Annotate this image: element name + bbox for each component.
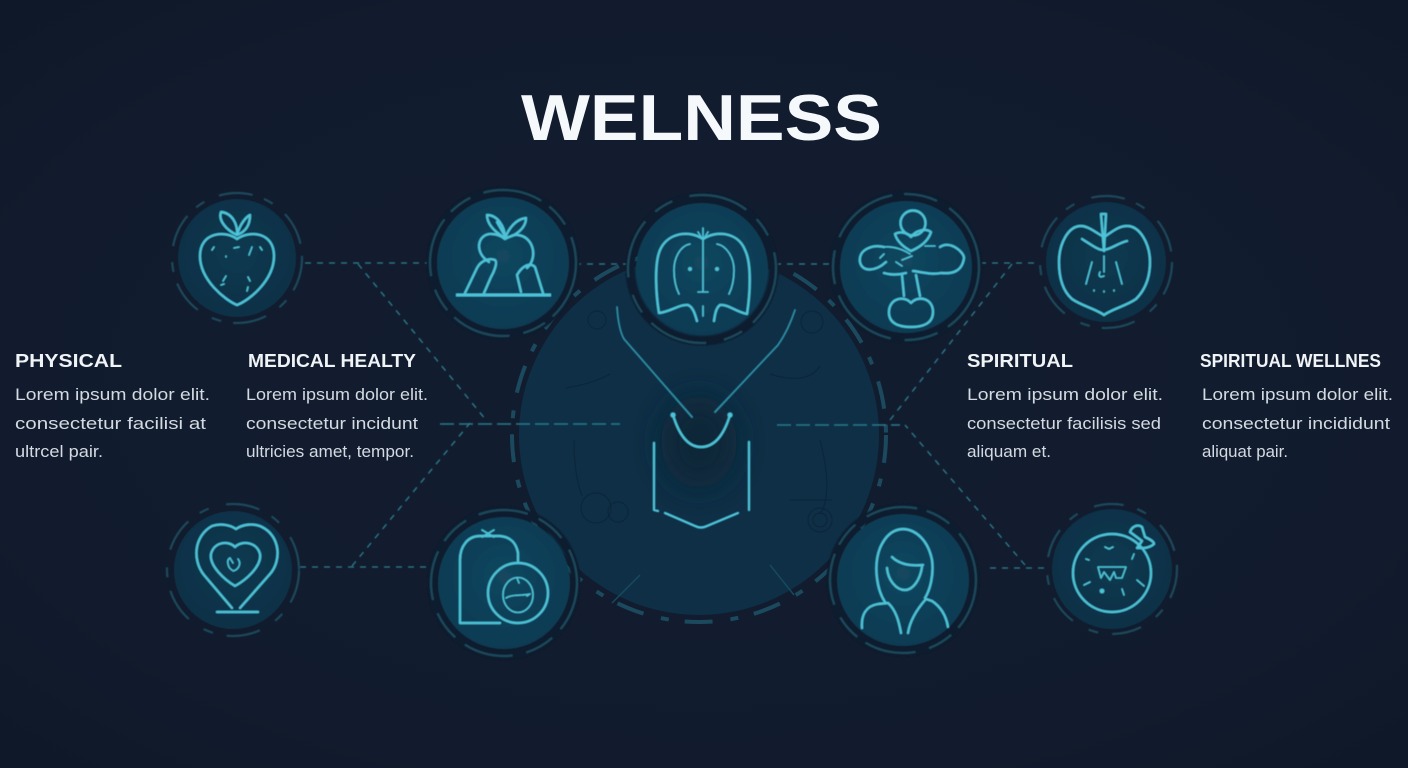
text block: spiritual wellness: consectetur incididunt	[1202, 414, 1390, 433]
text block: physical: consectetur facilisi at	[15, 414, 206, 433]
text block: medical health: consectetur incidunt	[246, 414, 418, 433]
text block: physical	[15, 351, 210, 461]
icon circle: woman	[830, 507, 976, 653]
title: WELNESS	[521, 81, 882, 154]
text block: spiritual	[967, 351, 1163, 461]
connector lines	[300, 263, 1046, 568]
icon circle: heart	[167, 504, 299, 636]
text block: spiritual wellness: aliquat pair.	[1202, 442, 1288, 461]
icon circle: apple and hands	[430, 190, 576, 336]
text block: spiritual: consectetur facilisis sed	[967, 414, 1161, 433]
text block: spiritual wellness: SPIRITUAL WELLNES	[1200, 351, 1381, 371]
icon circle: person portrait	[431, 510, 577, 656]
text block: medical health: ultricies amet, tempor.	[246, 442, 414, 461]
text block: medical health	[246, 351, 428, 461]
icon circle: fruit globe	[1047, 504, 1177, 634]
text block: physical: Lorem ipsum dolor elit.	[15, 385, 210, 404]
text block: physical: ultrcel pair.	[15, 442, 103, 461]
text block: spiritual wellness	[1200, 351, 1393, 461]
central body icon	[617, 307, 795, 528]
icon circle: lotus figure	[833, 194, 979, 340]
text block: spiritual wellness: Lorem ipsum dolor elit.	[1202, 385, 1393, 404]
text block: medical health: MEDICAL HEALTY	[248, 351, 416, 371]
icon circle: mind	[628, 195, 776, 343]
icon circle: leaf	[1040, 196, 1172, 328]
text block: physical: PHYSICAL	[15, 351, 122, 371]
central hub circle	[512, 248, 886, 622]
icon circle: fruit heart	[172, 193, 302, 323]
text block: spiritual: SPIRITUAL	[967, 351, 1073, 371]
text block: spiritual: Lorem ipsum dolor elit.	[967, 385, 1163, 404]
text block: spiritual: aliquam et.	[967, 442, 1051, 461]
text block: medical health: Lorem ipsum dolor elit.	[246, 385, 428, 404]
